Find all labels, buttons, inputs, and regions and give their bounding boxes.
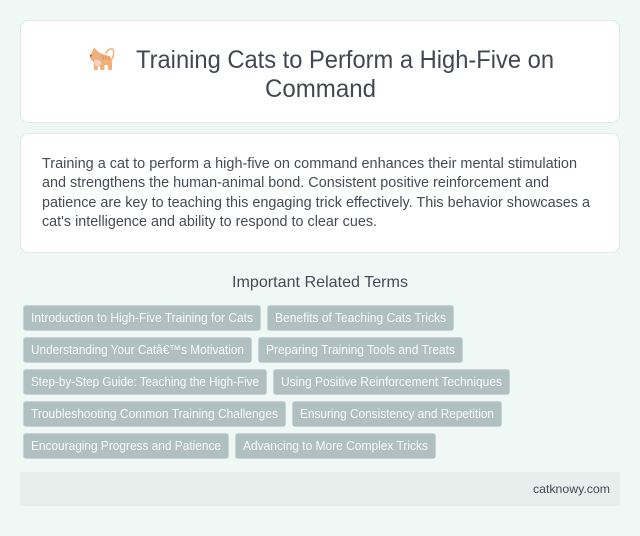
tag: Advancing to More Complex Tricks xyxy=(243,439,428,453)
tag: Preparing Training Tools and Treats xyxy=(266,343,455,357)
tag: Step-by-Step Guide: Teaching the High-Five xyxy=(31,375,259,389)
heading: related terms: Important Related Terms xyxy=(232,274,408,291)
tag xyxy=(24,306,260,330)
description text: patience are key to teaching this engaging trick effectively. This behavior showcases a xyxy=(42,195,591,211)
tag: Introduction to High-Five Training for Cats xyxy=(31,311,253,325)
tag xyxy=(24,434,228,458)
related term tags xyxy=(24,306,510,458)
title text: Training Cats to Perform a High-Five on xyxy=(136,46,554,74)
footer xyxy=(20,472,620,506)
description text xyxy=(42,156,591,230)
tag xyxy=(236,434,436,458)
tag xyxy=(24,402,286,426)
tag: Using Positive Reinforcement Techniques xyxy=(281,375,502,389)
panel: description xyxy=(20,134,620,252)
title text: Command xyxy=(265,75,376,103)
tag: Understanding Your Catâ€™s Motivation xyxy=(31,343,244,357)
tag xyxy=(268,306,454,330)
footer: catknowy.com xyxy=(533,482,610,496)
tag xyxy=(258,338,462,362)
tag xyxy=(24,338,252,362)
tag xyxy=(292,402,502,426)
tag xyxy=(24,370,266,394)
description text: and strengthens the human-animal bond. Consistent positive reinforcement and xyxy=(42,175,549,191)
title text xyxy=(136,46,554,103)
description text: cat's intelligence and ability to respond to clear cues. xyxy=(42,214,377,230)
tag: Troubleshooting Common Training Challenges xyxy=(31,407,278,421)
panel: title card xyxy=(20,20,620,122)
icon: cat xyxy=(90,48,114,70)
tag xyxy=(274,370,510,394)
description text: Training a cat to perform a high-five on command enhances their mental stimulation xyxy=(42,156,577,172)
tag: Encouraging Progress and Patience xyxy=(31,439,221,453)
tag: Ensuring Consistency and Repetition xyxy=(300,407,494,421)
tag: Benefits of Teaching Cats Tricks xyxy=(275,311,446,325)
